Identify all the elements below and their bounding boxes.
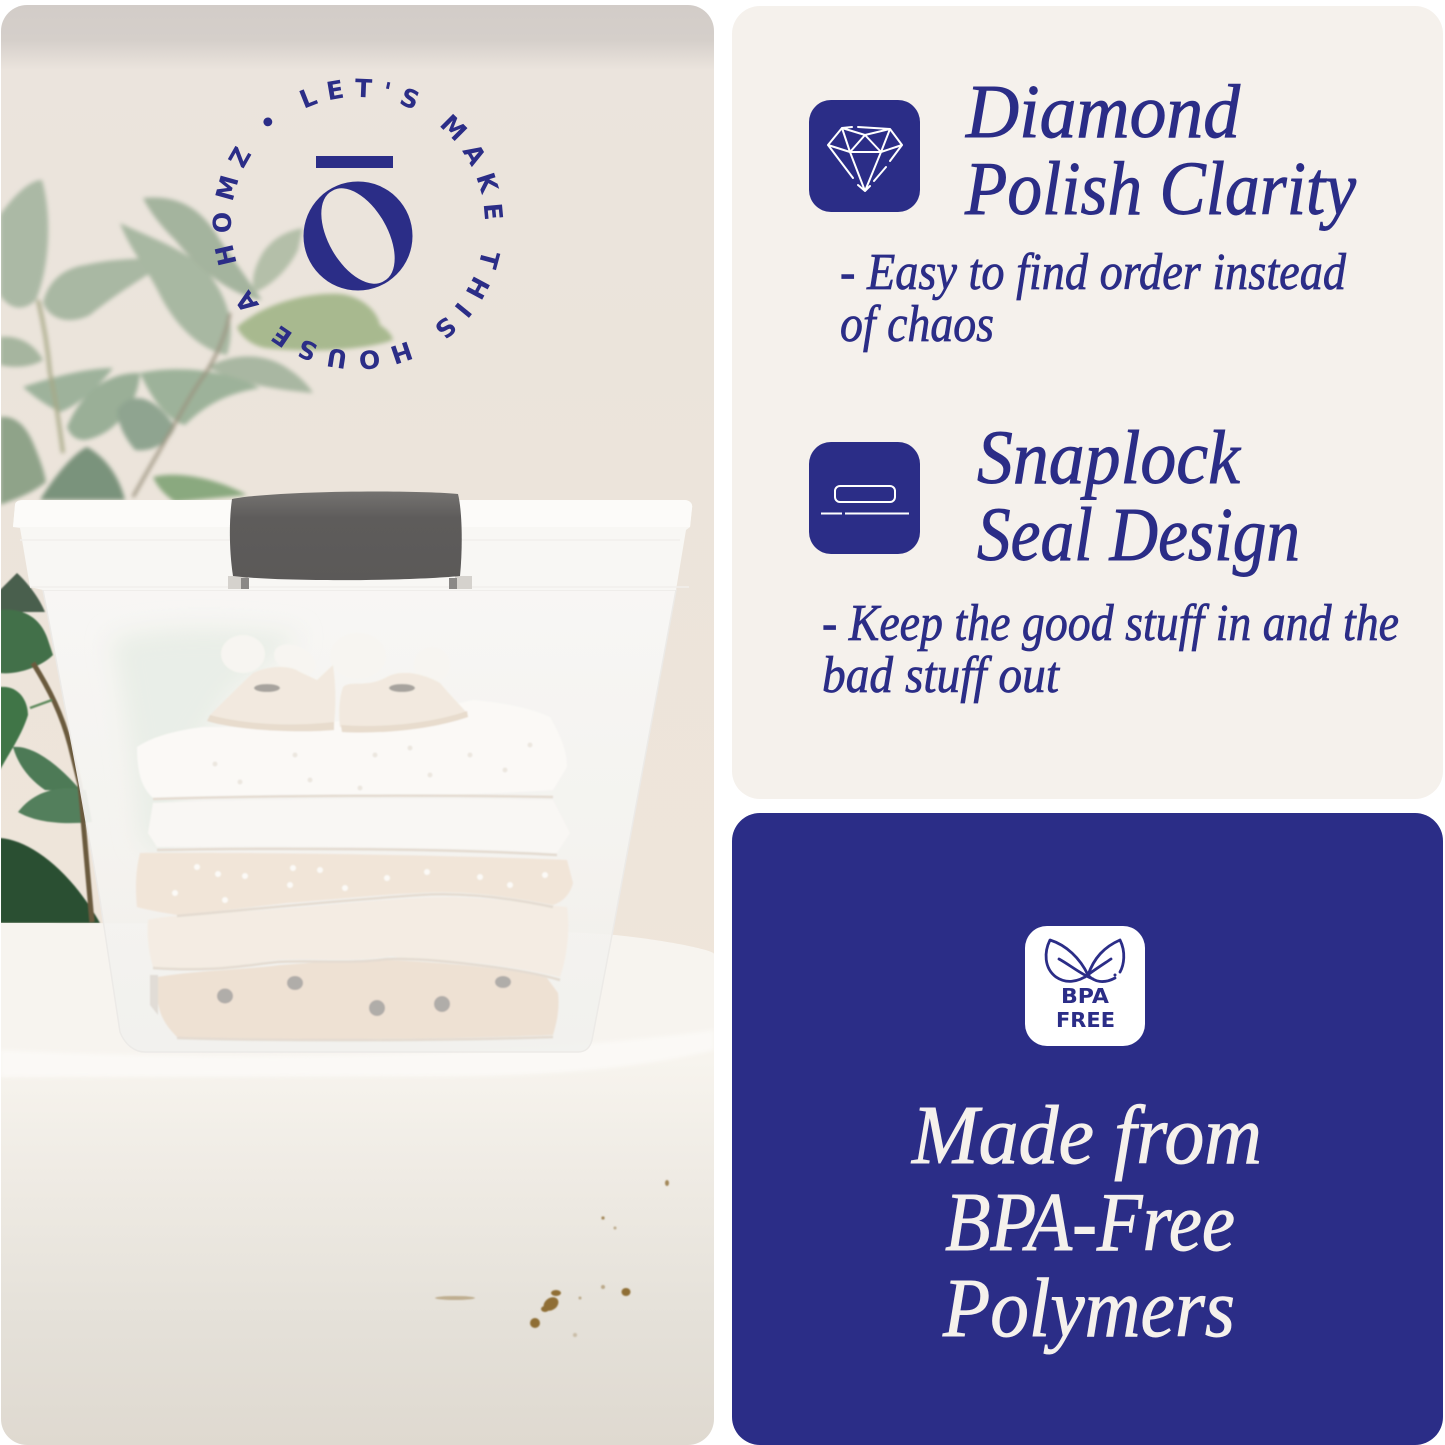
text: keep the good stuff	[822, 595, 1399, 704]
text: easy to find	[840, 244, 1347, 353]
heading: diamond polish clarity: Polish Clarity	[964, 147, 1356, 231]
table stains	[435, 1180, 669, 1337]
folded clothes stack	[136, 700, 573, 1040]
circular slogan: • LET'S MAKE THIS HOUSE A HOMZ	[212, 78, 504, 370]
heading: diamond polish clarity	[964, 70, 1356, 231]
eyelet embroidery	[212, 742, 532, 790]
table edge highlight	[0, 1030, 714, 1077]
layer shadows	[153, 796, 560, 1040]
heading: snaplock seal design: Seal Design	[977, 493, 1300, 577]
heading: snaplock seal design: Snaplock	[977, 416, 1241, 500]
plant shadow inside bin	[118, 632, 280, 824]
panel: features	[732, 6, 1443, 799]
logo bar	[316, 156, 393, 168]
left shoe	[210, 665, 335, 728]
clothes layer 2	[148, 802, 184, 846]
icon: snaplock	[809, 442, 920, 554]
icon: BPA free badge: BPA	[1061, 984, 1110, 1008]
table top	[1, 923, 714, 1050]
clothes layer 5	[157, 960, 559, 1039]
text: keep the good stuff: bad stuff out	[822, 647, 1060, 704]
circular logo badge	[212, 78, 504, 370]
latch hinges	[228, 576, 472, 589]
bin translucent overlay	[43, 590, 676, 1052]
heading: made from BPA-free polymers: Made from	[911, 1089, 1262, 1182]
features background	[732, 6, 1443, 799]
panel: product photo	[1, 5, 714, 1445]
plant: faded leaves	[0, 180, 393, 505]
bin body	[43, 590, 676, 1052]
logo ring	[304, 181, 412, 290]
baby shoes	[207, 633, 468, 732]
table front	[0, 1050, 714, 1445]
icon: diamond	[809, 100, 920, 212]
polka dots	[217, 976, 511, 1016]
plant: darker leaves behind bin	[0, 573, 100, 923]
heading: snaplock seal design	[977, 416, 1300, 577]
icon: BPA free badge	[1025, 926, 1145, 1046]
shoe ears	[221, 636, 280, 672]
clothes layer 1	[137, 728, 218, 798]
panel: BPA free	[732, 813, 1443, 1445]
grey handle latch	[230, 491, 462, 580]
BPA panel background	[732, 813, 1443, 1445]
heading: made from BPA-free polymers: BPA-Free	[945, 1176, 1235, 1269]
clothes dots	[172, 864, 548, 903]
heading: made from BPA-free polymers	[911, 1089, 1262, 1355]
icon: BPA free badge: FREE	[1056, 1008, 1115, 1032]
clothes layer 3	[136, 853, 573, 915]
heading: diamond polish clarity: Diamond	[965, 70, 1241, 154]
clear storage bin	[13, 491, 692, 1052]
wall background	[1, 5, 714, 954]
text: easy to find: - Easy to find order instead	[840, 244, 1347, 301]
heading: made from BPA-free polymers: Polymers	[942, 1262, 1235, 1355]
right shoe	[339, 673, 467, 729]
bin rim	[14, 527, 690, 590]
clothes layer 4	[148, 897, 568, 977]
text: easy to find: of chaos	[840, 296, 994, 353]
